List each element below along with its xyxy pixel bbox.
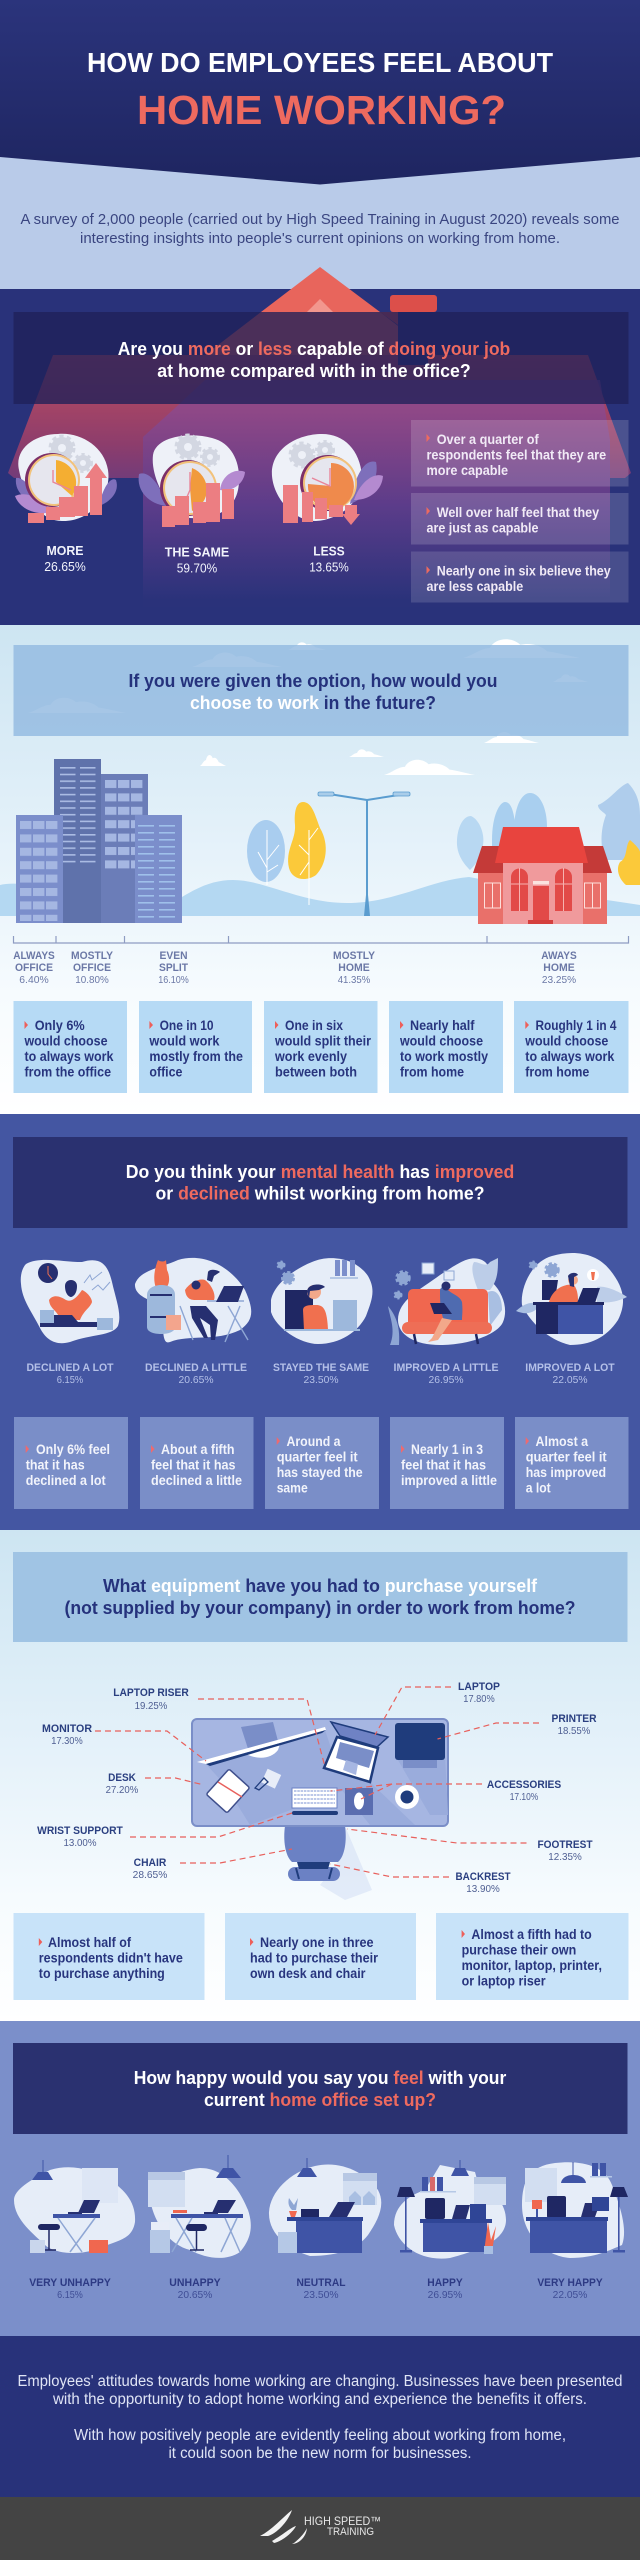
satisfaction labels [29,2277,603,2301]
callout: roughly 1 in 4: would choose [524,1034,609,1048]
question panel [13,2043,628,2134]
callout: almost half [14,1913,204,2000]
callout: almost half: Almost half of [48,1935,131,1950]
callout: one in 10: would work [148,1034,220,1048]
outcome labels: STAYED THE SAME [273,1362,369,1374]
callout: one in six: work evenly [274,1049,347,1064]
equipment labels: 28.65% [133,1869,167,1881]
outcome labels: 22.05% [552,1374,588,1386]
callout: nearly one in three: own desk and chair [250,1966,366,1981]
outcome labels [26,1362,615,1386]
callout: nearly one in three: Nearly one in three [260,1935,374,1950]
category labels: 13.65% [309,560,349,574]
callout: almost a quarter: quarter feel it [526,1450,607,1464]
equipment labels: 12.35% [548,1851,582,1863]
callout: nearly one in three: had to purchase their [250,1950,379,1966]
callout: almost a fifth: monitor, laptop, printer, [462,1958,602,1973]
equipment labels: 18.55% [558,1725,590,1737]
category labels: 59.70% [177,560,218,576]
icon: happy [394,2160,506,2259]
title: HOME WORKING? [137,87,506,133]
question panel: If you were given the option, how would you [128,670,498,691]
icon: the same [139,435,245,527]
callout: almost a quarter: a lot [526,1480,551,1496]
panel: equipment section [0,1530,640,2021]
callout: around a quarter: has stayed the [277,1465,363,1480]
callout: roughly 1 in 4: Roughly 1 in 4 [536,1018,617,1033]
hills and ground [0,877,640,916]
intro text: interesting insights into people's current opinions on working from home. [80,230,560,247]
question panel [14,645,628,736]
scale labels [13,950,577,986]
icon: high speed training logo [260,2510,381,2544]
equipment labels: WRIST SUPPORT [37,1825,123,1837]
panel: capability section [0,267,640,625]
question panel: (not supplied by your company) in order to work from home? [64,1597,576,1618]
scale labels: ALWAYS [13,950,55,962]
callout: over half [411,493,628,544]
icon: high speed training logo: TRAINING [327,2526,374,2538]
callout: only 6 percent: to always work [24,1049,114,1064]
icon: improved a lot [516,1253,627,1345]
scale labels: 41.35% [338,974,370,986]
callout: only 6 percent: from the office [24,1064,111,1080]
callout: over a quarter: Over a quarter of [437,432,539,447]
panel: mental health section [0,1114,640,1530]
callout: only 6 percent: Only 6% [35,1018,85,1033]
outcome labels: 6.15% [57,1374,83,1386]
panel: conclusion [0,2336,640,2497]
house illustration background [8,267,631,610]
icon: less [272,434,383,525]
scale labels: 6.40% [19,974,49,986]
callout: almost half: respondents didn't have [39,1950,183,1966]
section: header [0,0,640,290]
equipment labels: LAPTOP RISER [113,1687,189,1699]
icon: improved a little [388,1258,505,1345]
street lamp [318,792,410,916]
icon: unhappy [148,2155,251,2258]
question panel: What equipment have you had to purchase yourself [103,1575,538,1596]
scale labels: 16.10% [158,974,189,986]
question panel [13,1552,628,1642]
callout: almost a fifth [436,1913,628,2000]
callout: about a fifth: feel that it has [151,1458,236,1472]
scale labels: MOSTLY [71,950,114,962]
satisfaction labels: 22.05% [553,2289,587,2301]
equipment labels: ACCESSORIES [487,1779,561,1791]
equipment labels: 17.30% [51,1735,83,1747]
question panel: current home office set up? [204,2089,436,2110]
intro text [20,211,620,247]
category labels: MORE [46,543,84,558]
callout: nearly 1 in 3: Nearly 1 in 3 [411,1442,483,1457]
satisfaction labels: VERY UNHAPPY [29,2277,111,2289]
icon: very unhappy [14,2160,135,2253]
callout: one in six: One in six [285,1018,343,1033]
footer with logo [0,2497,640,2560]
icon: high speed training logo: HIGH SPEED™ [304,2514,381,2528]
satisfaction labels: 20.65% [178,2289,212,2301]
callout: almost a quarter: Almost a [536,1434,589,1449]
satisfaction labels: HAPPY [427,2277,463,2289]
callout: around a quarter [265,1417,379,1509]
clouds [28,639,588,775]
callout: over half: Well over half feel that they [437,505,600,520]
callout: over a quarter: more capable [426,463,509,478]
outcome labels: DECLINED A LITTLE [145,1362,247,1374]
callout: around a quarter: quarter feel it [277,1450,358,1464]
satisfaction labels: NEUTRAL [296,2277,346,2289]
callout: nearly half: would choose [399,1034,483,1048]
icon: declined a little [135,1258,251,1342]
satisfaction labels: 26.95% [428,2289,462,2301]
conclusion text: Employees' attitudes towards home working are changing. Businesses have been presented [18,2373,622,2390]
icon: neutral [269,2158,381,2256]
question panel: choose to work in the future? [190,692,436,713]
question panel [13,1137,628,1228]
callout: one in six: would split their [274,1034,372,1048]
title: HOW DO EMPLOYEES FEEL ABOUT [87,47,553,78]
equipment labels: 27.20% [106,1784,138,1796]
conclusion text [18,2373,622,2462]
callout: almost a fifth: or laptop riser [462,1974,546,1988]
callout: almost a fifth: purchase their own [462,1942,576,1958]
category labels [44,543,349,576]
conclusion text: it could soon be the new norm for businesses. [168,2445,472,2462]
question panel: Are you more or less capable of doing your job [118,338,510,359]
callout: one in 10: office [149,1064,183,1080]
callout: only 6 percent: would choose [24,1034,108,1048]
callout: one in six: are less capable [426,579,524,594]
conclusion text: With how positively people are evidently feeling about working from home, [74,2427,566,2444]
callout: around a quarter: Around a [286,1434,341,1449]
equipment labels: 17.10% [510,1791,538,1803]
title [87,47,553,133]
desk illustration [192,1719,448,1900]
callout: nearly half: Nearly half [410,1018,475,1033]
equipment labels: PRINTER [552,1713,597,1725]
trees [247,802,326,905]
outcome labels: IMPROVED A LOT [525,1362,615,1374]
callout: almost a quarter [515,1417,628,1509]
conclusion text: with the opportunity to adopt home working and experience the benefits it offers. [52,2391,587,2408]
callout: nearly half: from home [400,1064,464,1080]
callout: nearly half [389,1001,503,1093]
equipment labels: LAPTOP [458,1681,500,1693]
question panel [14,312,628,404]
outcome labels: 23.50% [304,1374,338,1386]
callout: over half: are just as capable [426,520,539,536]
outcome labels: IMPROVED A LITTLE [394,1362,498,1374]
callout: only 6 percent: Only 6% feel [36,1442,110,1457]
callout: one in six [411,552,628,602]
callout: one in six: between both [275,1064,357,1080]
panel: home office satisfaction section [0,2021,640,2337]
callout: over a quarter: respondents feel that they are [426,448,607,462]
scale labels: OFFICE [73,962,111,974]
callout: nearly half: to work mostly [400,1049,488,1064]
callout: over a quarter [411,420,628,486]
satisfaction labels: UNHAPPY [169,2277,221,2289]
callout: roughly 1 in 4: from home [525,1064,590,1080]
equipment labels: 13.00% [64,1837,96,1849]
callout: almost a quarter: has improved [526,1465,606,1480]
equipment labels: CHAIR [134,1857,166,1869]
callout: almost a fifth: Almost a fifth had to [471,1927,592,1942]
equipment labels: 13.90% [466,1883,500,1895]
intro text: A survey of 2,000 people (carried out by High Speed Training in August 2020) reveals some [20,211,620,228]
callout: nearly 1 in 3: feel that it has [401,1458,486,1472]
scale labels: AWAYS [541,950,577,962]
callout: only 6 percent [14,1417,128,1509]
callout: one in 10: mostly from the [149,1049,243,1064]
equipment labels: 17.80% [463,1693,495,1705]
callout: around a quarter: same [277,1480,308,1496]
office buildings [16,759,182,923]
callout: nearly 1 in 3: improved a little [401,1473,497,1488]
callout: about a fifth: About a fifth [161,1442,234,1457]
callout leader lines [95,1687,539,1877]
house illustration [457,783,640,924]
callout: nearly 1 in 3 [390,1417,504,1509]
icon: declined a lot [21,1260,119,1343]
callout: one in 10 [139,1001,252,1093]
scale labels: MOSTLY [333,950,376,962]
category labels: 26.65% [44,559,86,574]
satisfaction labels: VERY HAPPY [537,2277,603,2289]
category labels: THE SAME [165,544,230,560]
scale labels: HOME [543,962,575,974]
outcome labels: 20.65% [178,1374,214,1386]
callout: nearly one in three [225,1913,416,2000]
question panel: Do you think your mental health has improved [126,1161,514,1182]
callout: only 6 percent: that it has [26,1458,85,1472]
equipment labels: FOOTREST [538,1839,593,1851]
scale axis [14,936,628,943]
equipment labels: DESK [108,1772,136,1784]
scale labels: 23.25% [542,974,576,986]
icon: very happy [522,2162,628,2258]
satisfaction labels: 6.15% [57,2289,83,2301]
panel: future working preference section [0,625,640,1115]
question panel: at home compared with in the office? [157,360,471,381]
scale labels: SPLIT [159,962,188,974]
scale labels: HOME [338,962,370,974]
equipment labels [37,1681,597,1895]
callout: roughly 1 in 4 [514,1001,628,1093]
callout: one in six [264,1001,378,1093]
question panel: or declined whilst working from home? [156,1182,484,1204]
equipment labels: 19.25% [135,1700,167,1712]
scale labels: EVEN [160,950,188,962]
icon: stayed the same [271,1258,372,1344]
icon: more capable [15,434,117,523]
satisfaction labels: 23.50% [304,2289,338,2301]
equipment labels: BACKREST [456,1871,511,1883]
category labels: LESS [313,544,345,558]
outcome labels: 26.95% [428,1374,464,1386]
scale labels: OFFICE [15,962,53,974]
callout: one in six: Nearly one in six believe they [437,564,611,578]
callout: one in 10: One in 10 [160,1018,214,1033]
outcome labels: DECLINED A LOT [26,1362,114,1374]
question panel: How happy would you say you feel with your [134,2067,506,2088]
callout: roughly 1 in 4: to always work [525,1049,615,1064]
callout: about a fifth [140,1417,254,1509]
callout: about a fifth: declined a little [151,1473,242,1488]
callout: almost half: to purchase anything [39,1966,165,1981]
scale labels: 10.80% [75,974,109,986]
equipment labels: MONITOR [42,1723,92,1735]
callout: only 6 percent [14,1001,127,1093]
callout: only 6 percent: declined a lot [26,1473,106,1488]
